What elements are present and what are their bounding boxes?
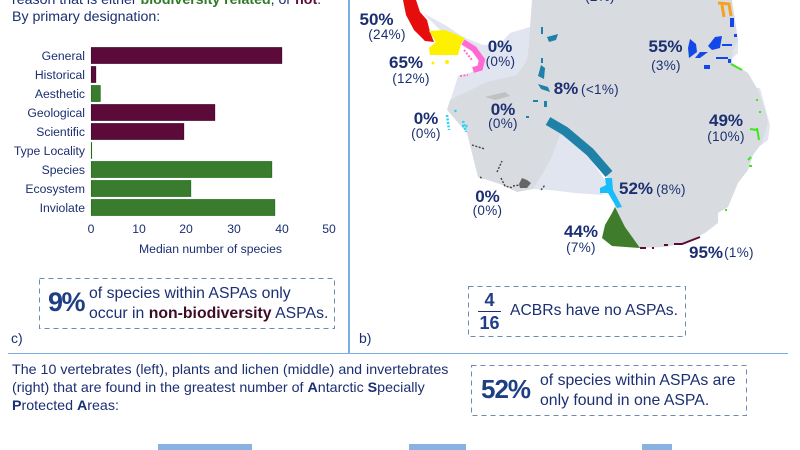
callout: 9% of species	[39, 278, 335, 329]
chart bar top: invertebrates	[642, 444, 672, 450]
map statistic labels	[359, 0, 754, 262]
map statistic labels: (24%)	[368, 27, 406, 42]
panel label b: b)	[359, 330, 371, 346]
bar chart: median species by designation: 10	[132, 222, 146, 236]
ACBR region: orange	[718, 3, 731, 17]
map statistic labels: 95%	[689, 243, 723, 262]
map statistic labels: (10%)	[707, 129, 745, 144]
map statistic labels: (0%)	[473, 203, 502, 218]
bar chart: median species by designation: Species	[42, 163, 85, 177]
bar chart: median species by designation: Historical	[35, 68, 85, 82]
ACBR region: green	[602, 207, 640, 248]
ACBR region: red	[403, 0, 434, 42]
bar chart: median species by designation: Scientific	[36, 125, 85, 139]
ACBR region: light blue	[600, 178, 622, 208]
bar chart: median species by designation: 50	[322, 222, 336, 236]
callout: 52% of species: 52%	[481, 374, 530, 404]
callout: 4/16 ACBRs: 4 16	[479, 290, 500, 333]
ACBR region: teal	[526, 27, 558, 118]
ACBR region: bright green	[725, 64, 761, 210]
panel c: intro text	[12, 0, 321, 25]
map statistic labels: 0%	[488, 37, 512, 56]
map statistic labels: 8%	[554, 79, 578, 98]
map statistic labels: (<1%)	[581, 82, 619, 97]
bar chart: median species by designation	[14, 47, 336, 256]
ACBR region: dark red	[640, 237, 700, 248]
bar chart: median species by designation: 30	[227, 222, 241, 236]
map statistic labels: (8%)	[656, 182, 686, 197]
panel label c: c)	[11, 330, 23, 346]
bar chart: median species by designation: Aesthetic	[35, 87, 85, 101]
map statistic labels: (7%)	[566, 240, 596, 255]
map statistic labels: 0%	[475, 187, 500, 206]
bar chart: median species by designation: 20	[179, 222, 193, 236]
map statistic labels: 44%	[564, 222, 598, 241]
map statistic labels: (0%)	[488, 116, 518, 131]
bar chart: median species by designation: Ecosystem	[25, 182, 85, 196]
bar chart: median species by designation: Inviolate	[40, 201, 85, 215]
callout: 52% of species: of species within ASPAs are	[540, 372, 736, 389]
map statistic labels: 0%	[491, 100, 515, 119]
callout: 9% of species: 9%	[48, 287, 84, 317]
callout: 9% of species: of species within ASPAs only	[89, 285, 291, 302]
ACBR region: blue	[688, 18, 737, 69]
bar chart: median species by designation: 0	[88, 222, 95, 236]
ice shelves	[423, 13, 770, 195]
map statistic labels: 55%	[648, 37, 683, 56]
callout: 52% of species	[471, 365, 747, 416]
pink specks	[460, 50, 472, 76]
map of Antarctica with ACBR regions	[359, 0, 770, 262]
map statistic labels: 65%	[389, 53, 423, 72]
bar chart: median species by designation: Median number of species	[139, 242, 282, 256]
panel border: vertical divider	[348, 0, 350, 353]
ACBR region: pink	[463, 42, 482, 70]
section text: top ten species: The 10 vertebrates (left), plants and lichen (middle) and invertebrates	[12, 362, 448, 378]
map statistic labels: 50%	[359, 10, 394, 29]
map statistic labels: 52%	[619, 179, 653, 198]
ACBR region: dark grey	[472, 145, 545, 190]
section text: top ten species: Protected Areas:	[12, 398, 119, 414]
ACBR region: yellow	[429, 30, 465, 64]
bar chart: median species by designation: Type Locality	[14, 144, 86, 158]
ACBR region: cyan	[447, 110, 468, 132]
bar chart: median species by designation: Geological	[27, 106, 85, 120]
bar chart: median species by designation: General	[42, 49, 85, 63]
map statistic labels: 0%	[414, 109, 438, 128]
map statistic labels: (0%)	[486, 54, 515, 69]
callout: 9% of species: occur in non-biodiversity ASPAs.	[89, 305, 328, 322]
callout: 52% of species: only found in one ASPA.	[540, 392, 709, 409]
bar chart: median species by designation: 40	[275, 222, 289, 236]
grey cluster	[519, 178, 531, 188]
callout: 4/16 ACBRs	[468, 286, 686, 337]
East and West Antarctica land	[447, 0, 768, 248]
chart bar top: plants and lichen	[409, 444, 466, 450]
teal strip along mountains	[548, 121, 609, 174]
ice rise	[485, 92, 510, 100]
map statistic labels: 49%	[709, 111, 743, 130]
callout: 4/16 ACBRs: ACBRs have no ASPAs.	[510, 302, 678, 319]
section text: top ten species	[12, 362, 448, 414]
map statistic labels: (0%)	[411, 126, 441, 141]
section text: top ten species: (right) that are found in the greatest number of Antarctic Specially	[12, 380, 425, 396]
map statistic labels: (1%)	[724, 245, 754, 260]
map statistic labels: (12%)	[392, 71, 430, 86]
panel c: intro text: By primary designation:	[12, 9, 160, 25]
map statistic labels: (3%)	[651, 58, 681, 73]
panel border: horizontal divider	[8, 353, 788, 354]
chart bar top: vertebrates	[158, 444, 252, 450]
